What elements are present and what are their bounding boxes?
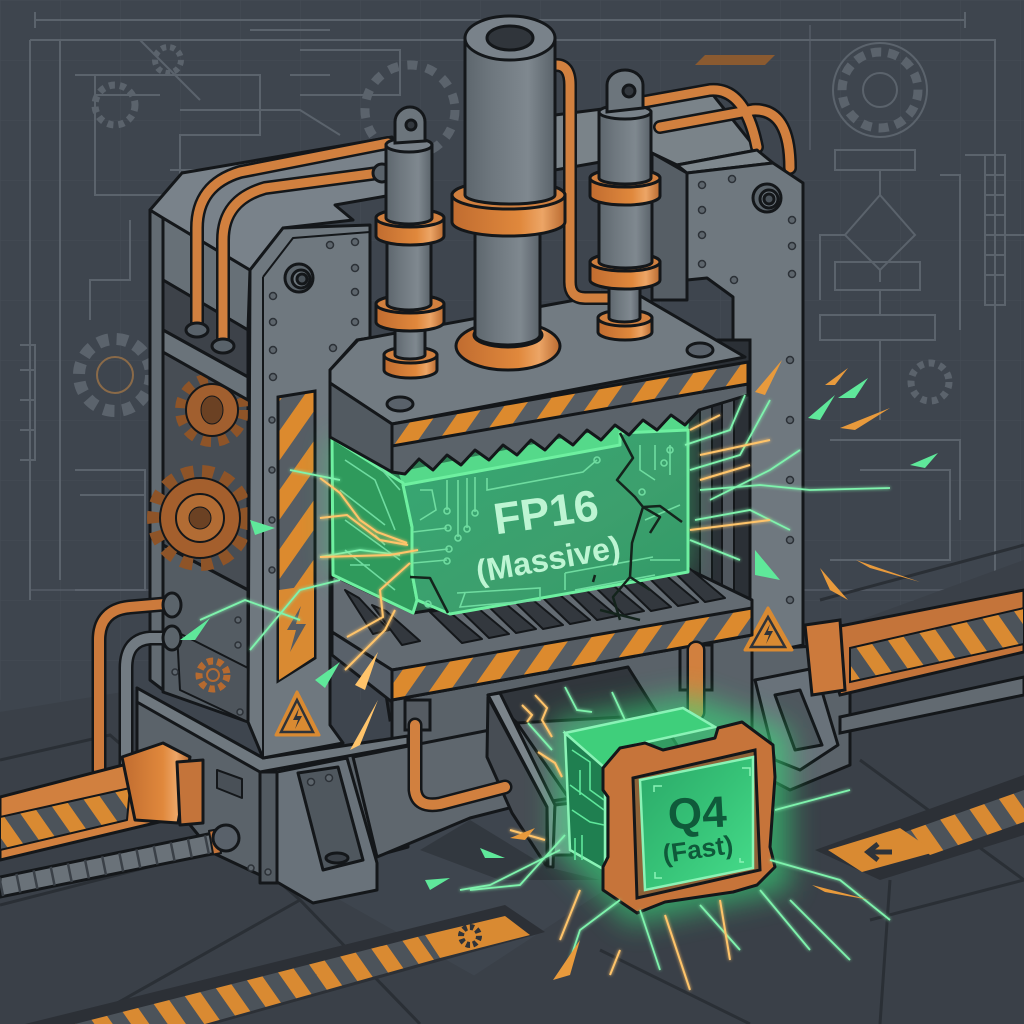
shards: green and orange	[180, 360, 938, 980]
floor hazard strip: right	[815, 775, 1024, 880]
left copper pipes	[197, 143, 388, 340]
left front plate	[248, 225, 370, 758]
label: Fast: (Fast)	[661, 829, 735, 869]
wall beneath press	[392, 635, 752, 820]
lower teeth ribs	[345, 568, 725, 645]
green glow behind block	[330, 420, 690, 620]
block front face	[403, 430, 688, 614]
right hydraulic cylinder	[590, 70, 660, 340]
background grid	[0, 0, 1024, 700]
frame inner recess	[633, 750, 760, 898]
warning triangle: frame	[276, 692, 319, 735]
green face	[640, 757, 753, 890]
right foot	[752, 645, 850, 790]
left conveyor	[0, 743, 239, 897]
block left face	[332, 438, 417, 613]
FP16 green block	[332, 412, 690, 620]
center hydraulic cylinder	[452, 16, 565, 370]
chamber interior	[330, 340, 750, 720]
right conveyor	[805, 590, 1024, 733]
gears	[156, 380, 244, 689]
left hydraulic cylinder	[376, 107, 444, 378]
lower left copper pipe	[415, 650, 696, 805]
upper platen	[330, 290, 748, 474]
label: Massive: (Massive)	[473, 529, 623, 590]
shadow below chute	[420, 820, 600, 880]
sparks: green	[200, 395, 890, 970]
cube glow	[555, 695, 790, 925]
hazard plate with lightning icon	[278, 391, 315, 681]
ledge	[163, 330, 248, 400]
center copper pipe	[555, 65, 608, 298]
blueprint schematic lines	[20, 12, 1024, 600]
floor hazard strip: bottom left	[25, 905, 545, 1024]
cube top	[565, 708, 715, 768]
cube side	[565, 733, 605, 870]
copper frame	[603, 722, 775, 913]
left foot	[277, 758, 377, 903]
pipe collars	[186, 164, 391, 353]
sparks: orange	[320, 415, 770, 990]
machine base	[137, 688, 513, 903]
cracks	[410, 433, 682, 620]
output chute	[487, 667, 680, 867]
floor	[0, 545, 1024, 1024]
left side pipes and valves	[99, 593, 181, 770]
label: FP16: FP16	[490, 481, 601, 544]
block top sliver	[398, 412, 690, 485]
right column	[652, 150, 803, 660]
warning triangle: right	[745, 608, 792, 650]
right copper pipes	[643, 90, 790, 168]
lower platen	[332, 568, 752, 702]
top beam	[150, 137, 392, 270]
rivets	[172, 176, 796, 875]
chamber back bars	[700, 390, 734, 600]
circuit traces	[340, 445, 680, 607]
Q4 cube	[565, 708, 775, 913]
right back beam	[555, 95, 757, 170]
label: Q4: Q4	[667, 787, 728, 840]
left frame strip and side	[150, 210, 250, 722]
